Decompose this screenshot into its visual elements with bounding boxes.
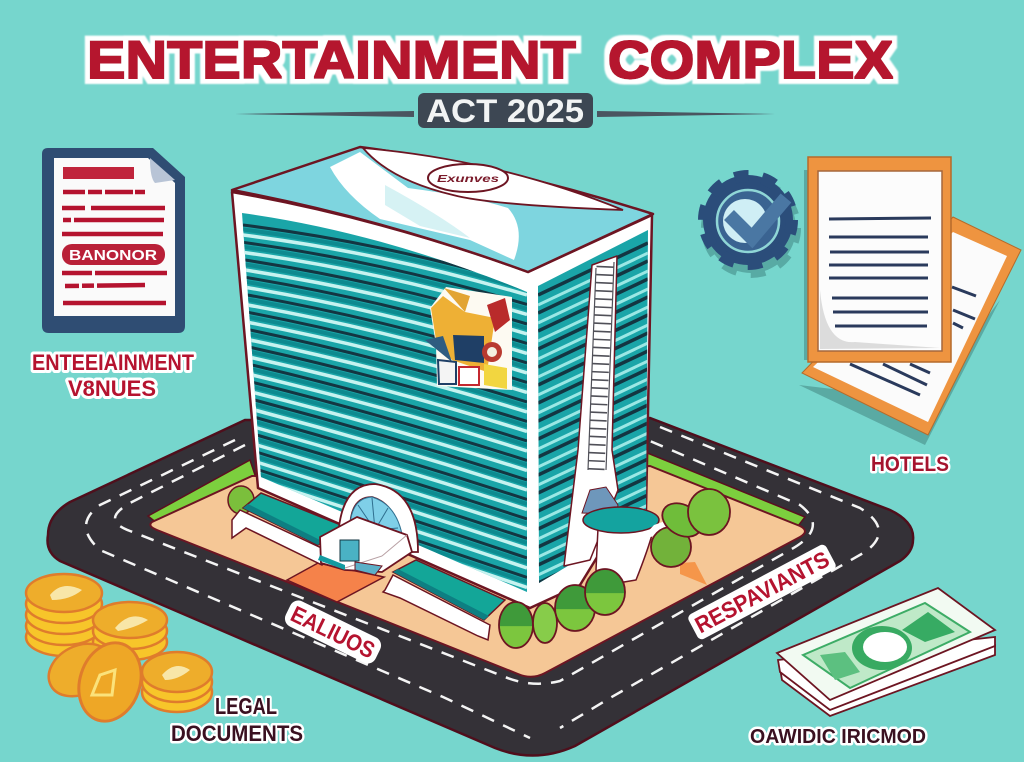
bill medallion bbox=[852, 626, 912, 670]
building body bbox=[232, 192, 652, 608]
icon: coin stacks bbox=[26, 574, 212, 729]
front paper bbox=[818, 171, 942, 351]
label: entertainment venues: ENTEEIAINMENT bbox=[32, 350, 194, 375]
document paper bbox=[54, 158, 175, 316]
gear shadow bbox=[706, 183, 796, 273]
entrance block bbox=[320, 517, 412, 572]
document stamp bbox=[62, 244, 165, 265]
road label: left: EALIUOS bbox=[287, 601, 379, 663]
bushes bbox=[499, 489, 730, 648]
green verges bbox=[148, 460, 256, 524]
title: ENTERTAINMENT COMPLEX bbox=[87, 31, 893, 90]
back paper bbox=[813, 232, 1007, 422]
icon: legal document bbox=[42, 148, 185, 333]
label: hotels: HOTELS bbox=[871, 453, 949, 476]
front paper lines bbox=[829, 218, 931, 326]
roof emblem bbox=[428, 164, 508, 192]
road label: right: RESPAVIANTS bbox=[691, 546, 833, 638]
front frame shadow bbox=[804, 170, 814, 360]
coin stack 1 bbox=[26, 574, 102, 656]
document heading bar bbox=[63, 167, 134, 179]
icon: banknote stack bbox=[777, 588, 995, 716]
label: legal documents: DOCUMENTS bbox=[171, 721, 303, 746]
bill face bbox=[803, 603, 970, 688]
label: legal documents bbox=[171, 693, 303, 746]
right canopy bench bbox=[383, 560, 505, 640]
entrance door bbox=[340, 540, 359, 561]
orange path bbox=[287, 563, 384, 602]
facade collage sign bbox=[425, 287, 512, 390]
label: entertainment venues bbox=[32, 350, 194, 401]
coin stack 3 bbox=[142, 652, 212, 712]
roof bbox=[232, 147, 653, 272]
label: bottom right caption: OAWIDIC IRICMOD bbox=[750, 726, 926, 748]
gear body bbox=[703, 175, 793, 265]
document frame bbox=[42, 148, 185, 333]
subtitle: act 2025: ACT 2025 bbox=[426, 93, 584, 129]
tilted coin back bbox=[40, 633, 120, 707]
blue rock bbox=[582, 487, 618, 514]
roof emblem: Exunves bbox=[437, 174, 500, 185]
building bbox=[232, 147, 653, 608]
panel: road and site plan bbox=[48, 418, 913, 756]
arch window bbox=[338, 484, 418, 552]
tower spine bbox=[564, 256, 618, 566]
subtitle: act 2025 bbox=[235, 93, 775, 129]
coin stack 2 bbox=[93, 602, 167, 660]
main entrance bbox=[318, 484, 418, 575]
bush behind left bbox=[228, 486, 254, 514]
document stamp: BANONOR bbox=[69, 247, 157, 264]
right facade windows bbox=[538, 230, 648, 583]
tilted coin front bbox=[69, 635, 151, 729]
front frame bbox=[808, 157, 951, 362]
back paper lines bbox=[850, 287, 976, 395]
back frame bbox=[802, 217, 1021, 435]
site lot bbox=[150, 466, 805, 677]
document lines bbox=[62, 192, 167, 303]
top bill bbox=[777, 588, 995, 700]
check mark bbox=[729, 198, 786, 238]
back frame shadow bbox=[799, 300, 1000, 445]
road dashes bbox=[86, 427, 879, 738]
label: entertainment venues: V8NUES bbox=[68, 376, 156, 401]
road bbox=[48, 418, 913, 756]
lower bills bbox=[780, 645, 995, 716]
roof highlight bbox=[330, 152, 519, 260]
left canopy bench bbox=[232, 493, 341, 565]
left facade windows bbox=[238, 205, 533, 607]
side pavilion bbox=[583, 507, 668, 585]
icon: framed documents bbox=[799, 157, 1021, 445]
ladder bbox=[596, 266, 605, 470]
label: legal documents: LEGAL bbox=[215, 693, 277, 719]
icon: gear check bbox=[703, 175, 796, 273]
